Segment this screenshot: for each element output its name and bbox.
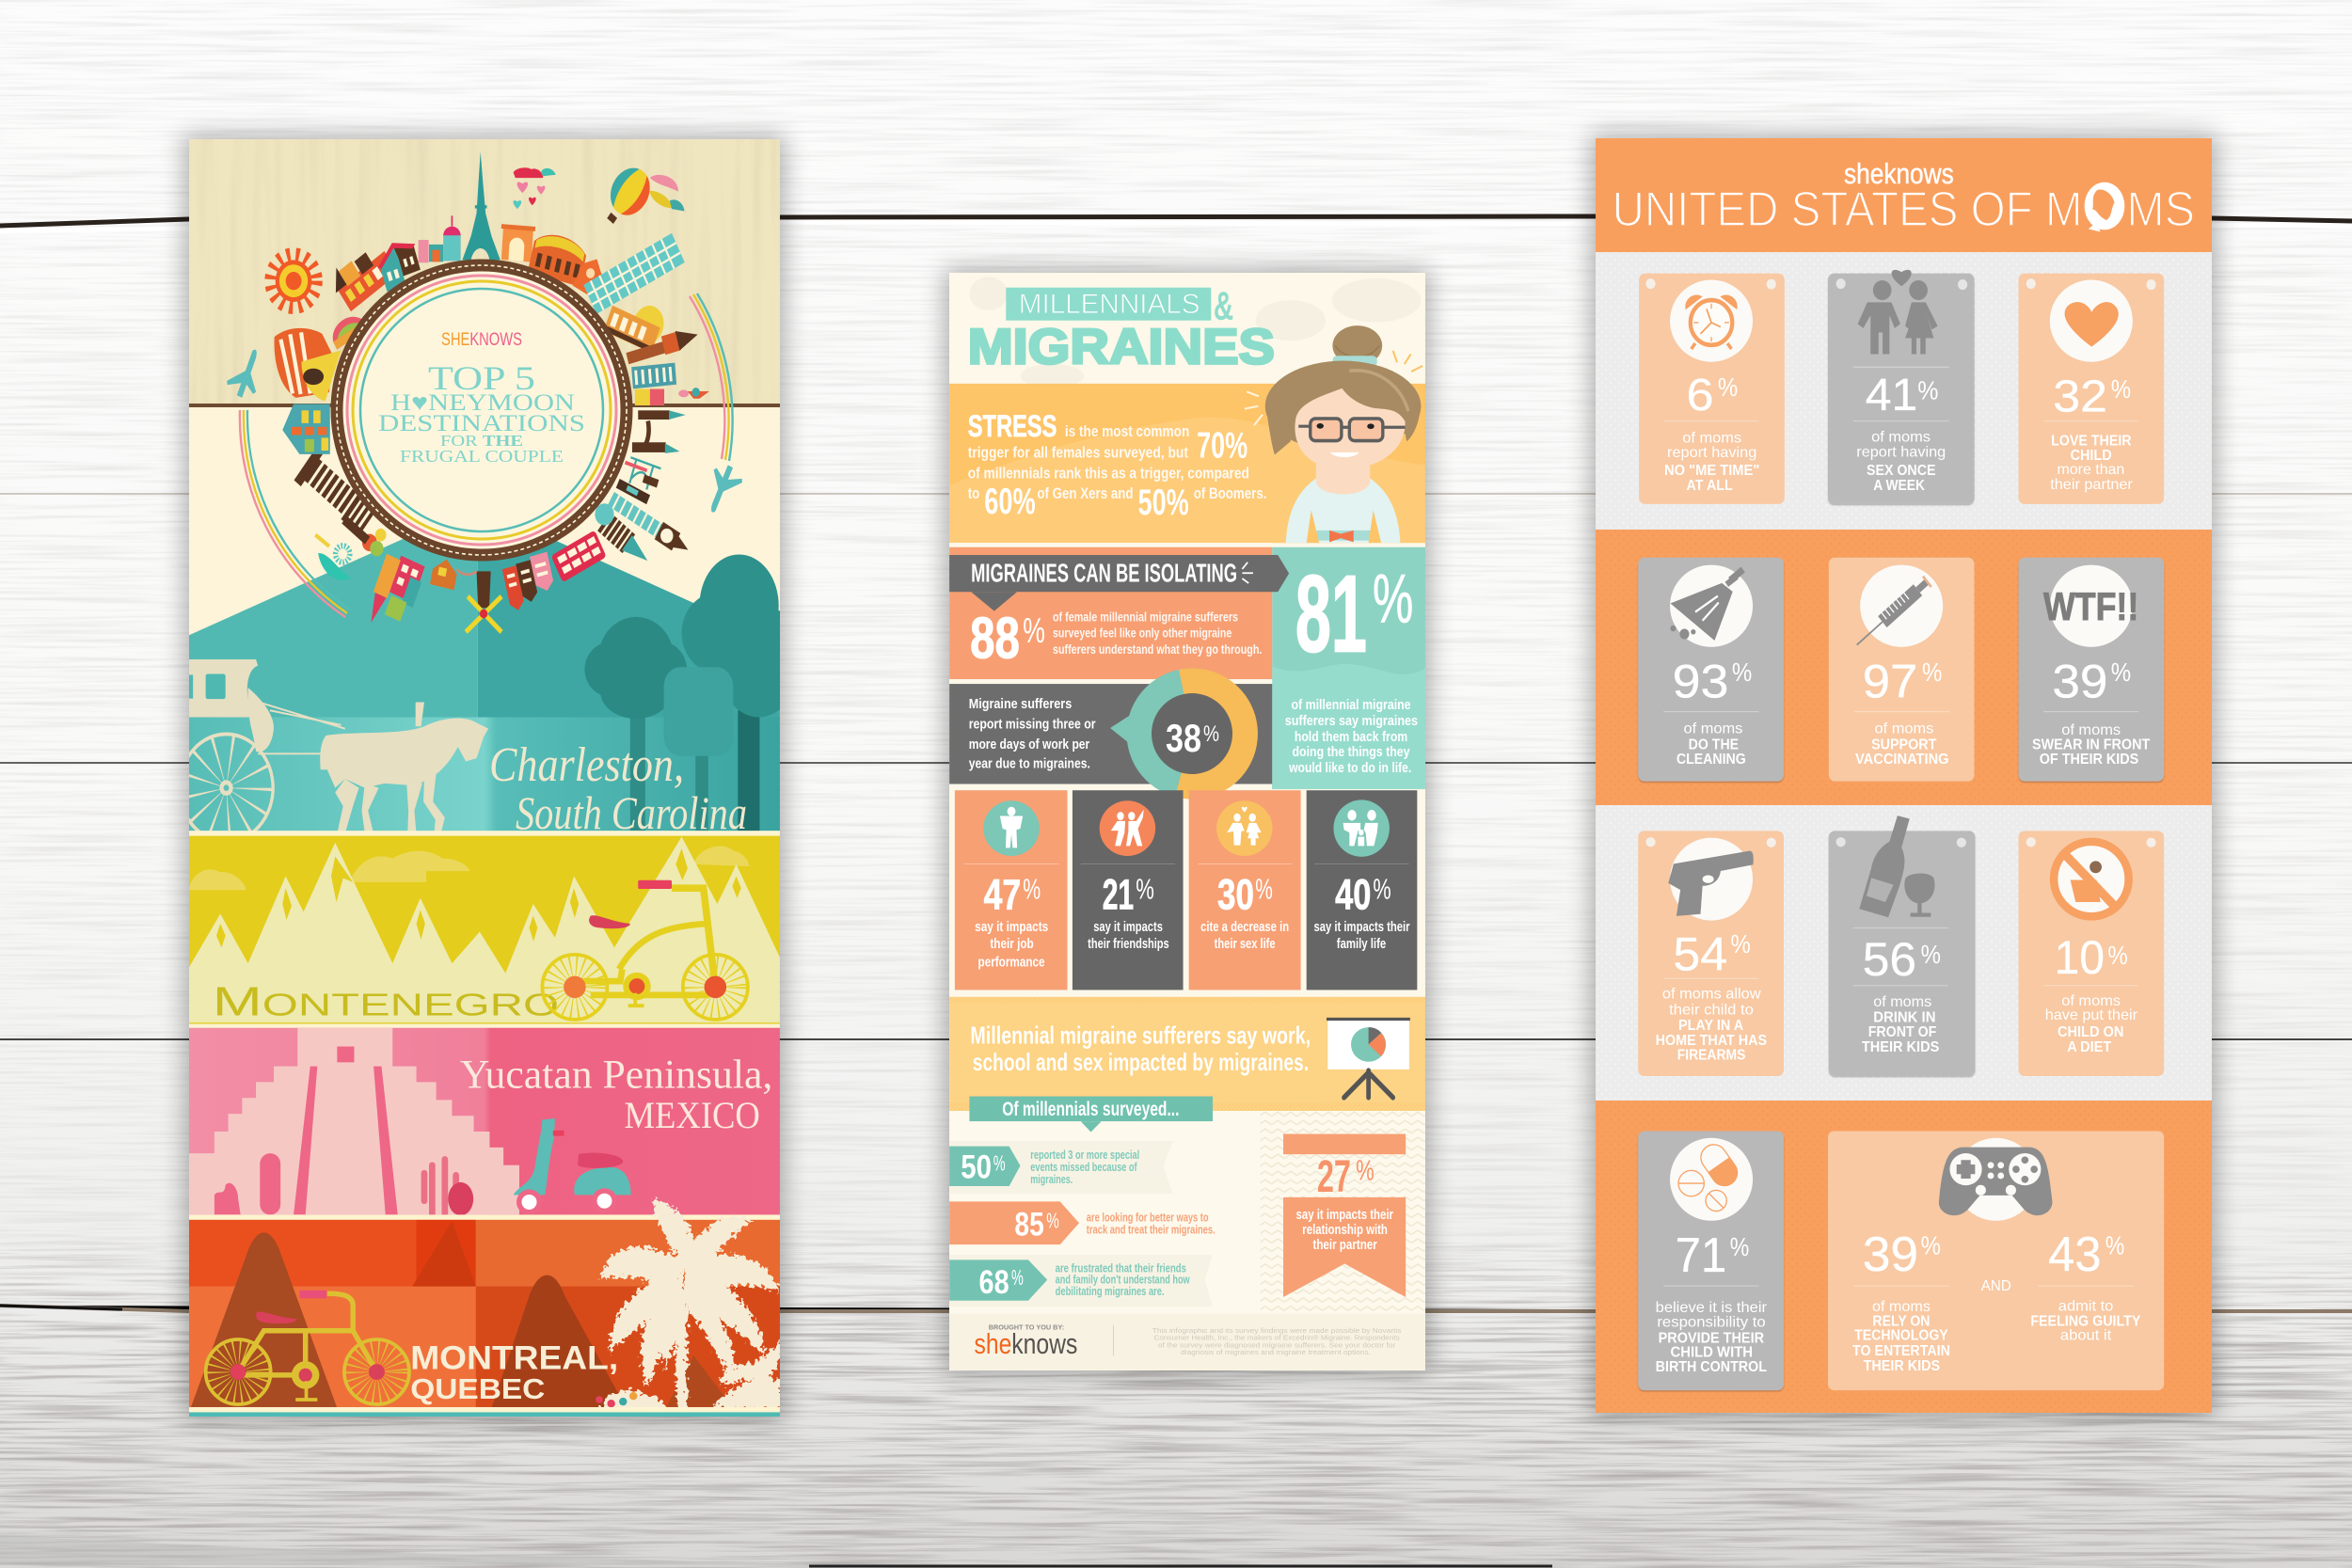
stat card: 32 percent love their child: more than <box>2058 462 2124 478</box>
stress section: 60% <box>984 481 1036 521</box>
stat card: 30 percent sex life: 30 <box>1217 870 1254 919</box>
survey row: 50 percent: 50 <box>961 1148 992 1185</box>
stat card: 6 percent no me time: report having <box>1667 444 1756 461</box>
section: 88 percent salmon panel: surveyed feel like only other migraine <box>1053 625 1232 641</box>
stat card: 47 percent job performance <box>955 790 1068 990</box>
stat card: 56 percent drink in front of kids: of moms <box>1873 994 1932 1010</box>
stat card: 10 percent child on a diet: have put their <box>2045 1007 2137 1023</box>
stat card: 56 percent drink in front of kids: THEIR KIDS <box>1862 1039 1939 1055</box>
stat card: 32 percent love their child: CHILD <box>2071 448 2112 464</box>
stat card: 54 percent firearms: their child to <box>1669 1003 1754 1019</box>
yellow callout: work, school and sex impacted: school and sex impacted by migraines. <box>973 1049 1309 1077</box>
stat card: 93 percent do the cleaning: % <box>1732 657 1752 687</box>
stat card: 21 percent friendships: % <box>1136 873 1154 905</box>
icon: pills <box>1678 1140 1742 1212</box>
stat card: 97 percent support vaccinating: 97 <box>1863 656 1917 708</box>
survey row: 50 percent: events missed because of <box>1030 1161 1137 1174</box>
place name: Yucatan Peninsula, Mexico: Yucatan Peninsula, <box>460 1053 772 1098</box>
stat card: 39 and 43 percent technology and guilt <box>1828 1132 2164 1390</box>
stat card: 39 and 43 percent technology and guilt: 43 <box>2048 1227 2102 1282</box>
stat card: 39 and 43 percent technology and guilt: of moms <box>1872 1299 1931 1315</box>
stress text block: of Gen Xers and <box>1037 486 1133 502</box>
stat card: 97 percent support vaccinating: of moms <box>1875 721 1933 737</box>
stat card: 71 percent birth control: believe it is their <box>1656 1300 1767 1316</box>
section: 88 percent salmon panel: 88 <box>970 605 1020 671</box>
stat card: 39 and 43 percent technology and guilt: admit to <box>2058 1299 2113 1315</box>
header and first two card rows <box>1613 159 2195 782</box>
stat card: 39 percent swear in front of kids: 39 <box>2052 656 2107 708</box>
stat card: 39 and 43 percent technology and guilt: THEIR KIDS <box>1864 1358 1940 1374</box>
stat card: 21 percent friendships: their friendships <box>1088 936 1169 951</box>
stat card: 39 and 43 percent technology and guilt: AND <box>1981 1278 2011 1294</box>
section: 38 percent donut: report missing three or <box>969 717 1096 733</box>
icon: couple with heart <box>1858 270 1938 354</box>
paper sky background <box>189 139 780 726</box>
icon: no dessert sign <box>2054 842 2129 916</box>
section: 81 percent teal panel <box>1272 547 1425 789</box>
title banner: Millennials & Migraines: MILLENNIALS <box>1019 289 1200 320</box>
banner: migraines can be isolating <box>949 555 1289 592</box>
place name: Charleston, South Carolina: Charleston, <box>489 738 684 792</box>
icon: sun <box>271 256 316 307</box>
title banner: Millennials & Migraines: & <box>1215 285 1233 327</box>
yellow callout: work, school and sex impacted: Millennial migraine sufferers say work, <box>970 1022 1311 1050</box>
panel: millennials and migraines poster <box>949 273 1425 1370</box>
section: 81 percent teal panel: hold them back from <box>1295 729 1407 745</box>
illustration: woman with glasses <box>1265 325 1421 543</box>
icon: presentation screen with pie chart <box>1327 1018 1410 1098</box>
stat card: 30 percent sex life <box>1189 790 1301 990</box>
stat card: 93 percent do the cleaning: DO THE <box>1689 736 1739 753</box>
survey row: 68 percent: % <box>1011 1266 1024 1290</box>
icon: handgun <box>1668 851 1754 916</box>
section: 38 percent donut: Migraine sufferers <box>969 697 1072 712</box>
stat card: 39 and 43 percent technology and guilt: about it <box>2060 1328 2112 1344</box>
place name: Montreal, Quebec <box>410 1340 618 1405</box>
stat card: 32 percent love their child: LOVE THEIR <box>2051 433 2132 450</box>
survey row: 50 percent: % <box>993 1152 1006 1176</box>
stat card: 39 percent swear in front of kids: of moms <box>2061 722 2121 738</box>
section: 81 percent teal panel: of millennial migraine <box>1291 698 1411 713</box>
icon: hearts and clouds <box>514 167 556 209</box>
icon: syringe <box>1852 576 1931 651</box>
ribbon: 27 percent relationship: 27 <box>1317 1151 1351 1202</box>
stat card: 6 percent no me time: 6 <box>1687 370 1714 420</box>
ribbon: 27 percent relationship: say it impacts their <box>1296 1207 1394 1222</box>
survey row: 50 percent <box>949 1141 1173 1194</box>
place name: Montreal, Quebec: QUEBEC <box>410 1374 545 1405</box>
stat card: 21 percent friendships: 21 <box>1103 870 1134 919</box>
skyline buildings around the ring <box>272 152 709 637</box>
stat card: 10 percent child on a diet: % <box>2107 941 2128 970</box>
survey row: 85 percent <box>949 1201 1216 1244</box>
section: 81 percent teal panel: doing the things they <box>1292 745 1410 760</box>
section: 81 percent teal panel: would like to do in life. <box>1288 761 1411 776</box>
title: top 5 honeymoon destinations: FRUGAL COUPLE <box>400 447 564 466</box>
stat card: 10 percent child on a diet <box>2019 831 2164 1076</box>
stat card: 6 percent no me time: NO "ME TIME" <box>1664 463 1759 479</box>
stat card: 39 percent swear in front of kids: WTF!! <box>2043 586 2138 628</box>
stat card: 10 percent child on a diet: CHILD ON <box>2058 1024 2123 1040</box>
stat card: 56 percent drink in front of kids: FRONT OF <box>1868 1024 1936 1040</box>
stat card: 97 percent support vaccinating <box>1829 558 1974 782</box>
icon: airplane right <box>711 465 742 513</box>
ring with title <box>337 265 627 555</box>
Charleston scene with mountain, trees and carriage <box>189 539 780 833</box>
panel: honeymoon destinations poster <box>180 139 801 1418</box>
stat card: 54 percent firearms <box>1638 831 1784 1076</box>
stat card: 71 percent birth control <box>1638 1132 1784 1390</box>
stat card: 54 percent firearms: 54 <box>1673 927 1727 981</box>
stat card: 39 and 43 percent technology and guilt: 39 <box>1863 1227 1918 1282</box>
icon: yellow bicycle <box>542 880 748 1020</box>
stat card: 47 percent job performance: their job <box>990 936 1034 951</box>
upper section: header, stress and isolating stats <box>949 277 1425 789</box>
chart: 38 percent donut <box>1110 668 1258 800</box>
stat card: 54 percent firearms: FIREARMS <box>1677 1047 1745 1063</box>
ribbon: 27 percent relationship <box>1283 1134 1406 1297</box>
stress section <box>949 325 1425 543</box>
stat card: 47 percent job performance: 47 <box>984 870 1021 919</box>
stat card: 71 percent birth control: BIRTH CONTROL <box>1656 1359 1767 1375</box>
stat card: 6 percent no me time: AT ALL <box>1687 478 1733 494</box>
stat card: 54 percent firearms: HOME THAT HAS <box>1656 1033 1767 1049</box>
stat card: 10 percent child on a diet: 10 <box>2055 930 2105 984</box>
stat card: 56 percent drink in front of kids <box>1829 816 1975 1076</box>
icon: heart <box>2065 302 2119 347</box>
stat card: 47 percent job performance: % <box>1023 873 1041 905</box>
survey row: 50 percent: reported 3 or more special <box>1030 1148 1139 1162</box>
stat card: 39 and 43 percent technology and guilt: TECHNOLOGY <box>1854 1328 1948 1344</box>
stat card: 41 percent sex once a week: % <box>1917 376 1938 405</box>
stress text block: to <box>968 486 979 502</box>
stat card: 30 percent sex life: cite a decrease in <box>1200 919 1289 934</box>
footer with logo and disclaimer: Consumer Health, Inc., the makers of Excedrin® Migraine. Respondents <box>1153 1334 1400 1342</box>
yellow callout: work, school and sex impacted <box>949 997 1425 1111</box>
stress text block <box>968 408 1266 502</box>
stat card: 40 percent family life <box>1307 790 1417 990</box>
panel: United States of Moms poster <box>1596 138 2212 1413</box>
title: United States of Moms <box>1613 159 2195 236</box>
section: 88 percent salmon panel: sufferers understand what they go through. <box>1053 641 1262 657</box>
stat card: 39 percent swear in front of kids <box>2019 558 2164 782</box>
title: United States of Moms: MS <box>2126 181 2195 236</box>
banner: of millennials surveyed <box>969 1097 1213 1132</box>
stress text block: is the most common <box>1065 424 1189 440</box>
stat card: 56 percent drink in front of kids: % <box>1921 940 1941 969</box>
section: 81 percent teal panel: 81 <box>1295 553 1367 674</box>
survey row: 68 percent: debilitating migraines are. <box>1056 1285 1165 1298</box>
survey section background <box>949 1111 1425 1314</box>
place name: Charleston, South Carolina: South Carolina <box>516 786 747 839</box>
stat card: 54 percent firearms: PLAY IN A <box>1678 1018 1743 1034</box>
title: top 5 honeymoon destinations: TOP 5 <box>428 359 535 397</box>
stat card: 30 percent sex life: % <box>1255 873 1273 905</box>
banner: migraines can be isolating: MIGRAINES CAN BE ISOLATING <box>971 559 1237 588</box>
title banner: Millennials & Migraines: MIGRAINES <box>968 318 1275 374</box>
stat card: 21 percent friendships: say it impacts <box>1093 919 1163 934</box>
stat card: 93 percent do the cleaning: 93 <box>1673 656 1728 708</box>
stat card: 39 percent swear in front of kids: SWEAR IN FRONT <box>2032 736 2151 753</box>
stat card: 71 percent birth control: responsibility to <box>1657 1315 1766 1331</box>
globe header with skyline ring <box>224 152 745 637</box>
stress text block: of millennials rank this as a trigger, compared <box>968 466 1249 483</box>
survey row: 68 percent <box>949 1255 1213 1307</box>
stress section: 50% <box>1138 482 1189 522</box>
section: 88 percent salmon panel: % <box>1023 610 1045 650</box>
stat card: 32 percent love their child: their partner <box>2050 477 2133 493</box>
stripe and Montenegro band: MONTENEGRO <box>213 979 559 1025</box>
stat card: 39 percent swear in front of kids: OF THEIR KIDS <box>2040 751 2138 768</box>
icon: scooter <box>514 1118 631 1214</box>
stat card: 39 and 43 percent technology and guilt: % <box>2106 1231 2124 1260</box>
stat card: 71 percent birth control: CHILD WITH <box>1670 1345 1753 1361</box>
stress text block: of Boomers. <box>1194 486 1266 502</box>
SheKnows logo: SHEKNOWS <box>441 330 522 350</box>
stat card: 93 percent do the cleaning: of moms <box>1684 721 1742 737</box>
section: 81 percent teal panel: % <box>1373 561 1413 638</box>
icon: palm tree <box>598 1201 783 1417</box>
stat card: 97 percent support vaccinating: VACCINATING <box>1855 751 1949 768</box>
stress section: 70% <box>1197 424 1248 466</box>
stat card: 97 percent support vaccinating: % <box>1922 657 1942 687</box>
stat card: 6 percent no me time: % <box>1718 372 1738 402</box>
stat card: 97 percent support vaccinating: SUPPORT <box>1871 736 1937 753</box>
icon: alarm clock <box>1685 294 1738 349</box>
Montreal band <box>189 1201 783 1418</box>
stat card: 6 percent no me time: of moms <box>1682 430 1741 447</box>
survey row: 68 percent: 68 <box>979 1263 1009 1301</box>
stat card: 39 and 43 percent technology and guilt: % <box>1921 1231 1941 1260</box>
stat card: 47 percent job performance: say it impacts <box>975 919 1048 934</box>
survey row: 68 percent: and family don't understand how <box>1056 1274 1190 1287</box>
section: 38 percent donut: more days of work per <box>969 737 1089 752</box>
survey row: 50 percent: migraines. <box>1030 1173 1073 1186</box>
footer with logo and disclaimer <box>949 1314 1425 1370</box>
stat card: 40 percent family life: 40 <box>1335 870 1371 919</box>
title: top 5 honeymoon destinations <box>378 367 583 462</box>
stat card: 41 percent sex once a week: SEX ONCE <box>1867 463 1935 479</box>
stress text block: trigger for all females surveyed, but <box>968 445 1189 462</box>
stat card: 93 percent do the cleaning: CLEANING <box>1677 751 1746 768</box>
stat card: 10 percent child on a diet: A DIET <box>2067 1039 2112 1055</box>
icon: wine bottle and glass <box>1859 816 1934 917</box>
section: 38 percent donut: year due to migraines. <box>969 756 1090 772</box>
title: United States of Moms: UNITED STATES OF M <box>1613 181 2082 236</box>
stat card: 41 percent sex once a week: report having <box>1856 444 1946 460</box>
section: 81 percent teal panel: sufferers say migraines <box>1285 714 1418 729</box>
survey row: 85 percent: % <box>1046 1210 1059 1233</box>
stripe and Montenegro band <box>189 831 780 1028</box>
stat card: 56 percent drink in front of kids: DRINK IN <box>1873 1009 1935 1025</box>
footer with logo and disclaimer: BROUGHT TO YOU BY: <box>989 1324 1064 1332</box>
stat card: 30 percent sex life: their sex life <box>1215 936 1276 951</box>
stat card: 56 percent drink in front of kids: 56 <box>1863 932 1916 986</box>
title: top 5 honeymoon destinations: H♥NEYMOON <box>390 390 575 416</box>
icon: broom <box>1670 567 1745 641</box>
lower section: impact stats and survey rows <box>949 790 1425 1370</box>
place name: Charleston, South Carolina <box>491 747 745 830</box>
stat card: 71 percent birth control: % <box>1730 1232 1749 1261</box>
section: 38 percent donut <box>949 679 1272 784</box>
stat card: 41 percent sex once a week: A WEEK <box>1873 478 1925 494</box>
stat card: 40 percent family life: % <box>1373 873 1391 905</box>
banner: of millennials surveyed: Of millennials surveyed... <box>1002 1098 1179 1120</box>
stat card: 41 percent sex once a week: 41 <box>1866 370 1917 420</box>
stat card: 47 percent job performance: performance <box>978 954 1045 970</box>
stat card: 54 percent firearms: of moms allow <box>1662 987 1762 1003</box>
headache rays <box>1245 391 1263 425</box>
icon: yellow bicycle <box>206 1291 409 1404</box>
ribbon: 27 percent relationship: % <box>1356 1154 1375 1186</box>
footer with logo and disclaimer: of the survey were diagnosed migraine sufferers. See your doctor for <box>1158 1342 1396 1350</box>
place name: Yucatan Peninsula, Mexico <box>460 1053 772 1136</box>
footer with logo and disclaimer: sheknows <box>974 1328 1077 1360</box>
ribbon: 27 percent relationship: relationship with <box>1302 1222 1388 1237</box>
stat card: 39 percent swear in front of kids: % <box>2111 657 2131 687</box>
survey row: 85 percent: 85 <box>1014 1206 1044 1243</box>
chart: 38 percent donut: % <box>1203 721 1219 747</box>
stat card: 41 percent sex once a week <box>1828 270 1974 504</box>
stat card: 40 percent family life: family life <box>1337 936 1387 951</box>
footer with logo and disclaimer: diagnosis of migraines and migraine treatment options. <box>1181 1350 1371 1356</box>
stat card: 41 percent sex once a week: of moms <box>1871 429 1931 446</box>
ribbon: 27 percent relationship: their partner <box>1312 1237 1377 1252</box>
stat card: 71 percent birth control: 71 <box>1676 1228 1726 1283</box>
rainbow flight path arcs <box>240 293 733 617</box>
stat card: 32 percent love their child: 32 <box>2053 371 2107 421</box>
stat card: 40 percent family life: say it impacts their <box>1313 919 1410 934</box>
stat card: 6 percent no me time <box>1639 274 1785 504</box>
stat card: 71 percent birth control: PROVIDE THEIR <box>1659 1330 1764 1346</box>
stat card: 39 and 43 percent technology and guilt: RELY ON <box>1872 1314 1930 1330</box>
stat card: 32 percent love their child <box>2019 274 2164 504</box>
icon: airplane left <box>227 350 257 398</box>
stat card: 32 percent love their child: % <box>2111 374 2131 404</box>
stress text block: STRESS <box>968 408 1057 443</box>
place name: Yucatan Peninsula, Mexico: MEXICO <box>625 1094 760 1136</box>
chart: 38 percent donut: 38 <box>1166 716 1201 760</box>
stat card: 39 and 43 percent technology and guilt: FEELING GUILTY <box>2030 1314 2140 1330</box>
last two card rows <box>1638 816 2164 1390</box>
place name: Montreal, Quebec: MONTREAL, <box>410 1340 618 1377</box>
section: 88 percent salmon panel <box>949 543 1272 679</box>
survey row: 85 percent: are looking for better ways to <box>1087 1212 1209 1225</box>
poster section bands <box>1596 138 2212 1413</box>
footer with logo and disclaimer: This infographic and its survey findings were made possible by Novartis <box>1152 1328 1402 1335</box>
survey row: 68 percent: are frustrated that their friends <box>1056 1262 1186 1275</box>
survey row: 85 percent: track and treat their migraines. <box>1087 1224 1216 1237</box>
Yucatan band <box>189 1028 780 1220</box>
stat card: 21 percent friendships <box>1073 790 1184 990</box>
section: 88 percent salmon panel: of female millennial migraine sufferers <box>1053 609 1238 624</box>
stat card: 93 percent do the cleaning <box>1638 558 1784 782</box>
title banner: Millennials & Migraines <box>968 285 1275 374</box>
stat card: 54 percent firearms: % <box>1731 929 1751 958</box>
title: top 5 honeymoon destinations: DESTINATIONS <box>378 411 585 436</box>
icon: hot air balloon <box>607 167 685 224</box>
icon: game controller <box>1939 1148 2052 1215</box>
title: top 5 honeymoon destinations: FOR THE <box>440 432 523 450</box>
title: United States of Moms: sheknows <box>1844 159 1954 190</box>
stat card: 10 percent child on a diet: of moms <box>2061 993 2121 1009</box>
stat card: 39 and 43 percent technology and guilt: TO ENTERTAIN <box>1852 1343 1950 1359</box>
